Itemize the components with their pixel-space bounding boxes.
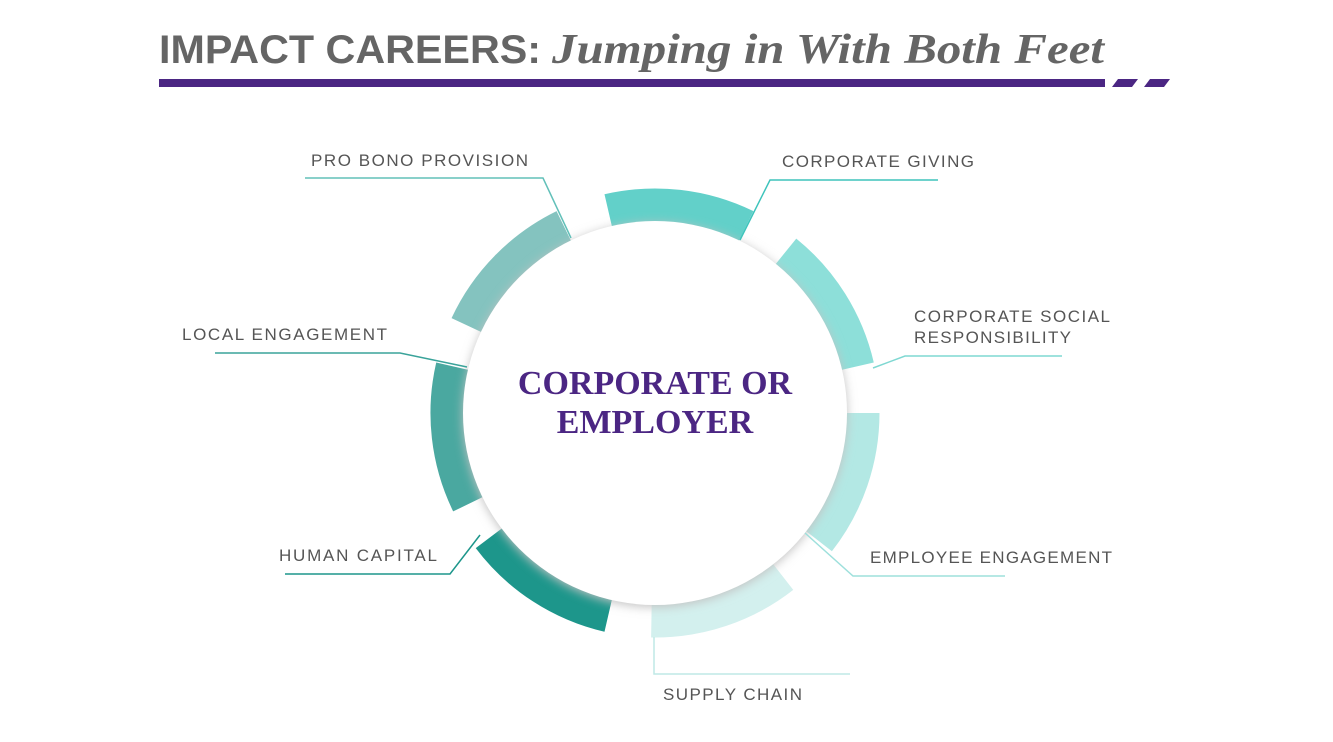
- labels: EMPLOYEE ENGAGEMENT: [870, 548, 1112, 567]
- center text: EMPLOYER: [557, 404, 754, 441]
- labels: RESPONSIBILITY: [914, 328, 1071, 347]
- labels: SUPPLY CHAIN: [663, 685, 802, 704]
- leader lines: [215, 178, 1062, 674]
- title: Jumping in With Both Feet: [551, 27, 1106, 73]
- center circle: [463, 221, 847, 605]
- center text: CORPORATE OR: [518, 365, 793, 402]
- labels: CORPORATE SOCIAL: [914, 307, 1110, 326]
- title: [159, 27, 1106, 73]
- labels: PRO BONO PROVISION: [311, 151, 528, 170]
- title: IMPACT CAREERS:: [159, 28, 541, 72]
- ring segments: [447, 205, 863, 621]
- labels: CORPORATE GIVING: [782, 152, 974, 171]
- labels: HUMAN CAPITAL: [279, 546, 437, 565]
- labels: [182, 151, 1112, 704]
- center text: [518, 365, 793, 441]
- title underline bar: [159, 79, 1170, 87]
- center circle shadow: [463, 223, 847, 607]
- labels: LOCAL ENGAGEMENT: [182, 325, 387, 344]
